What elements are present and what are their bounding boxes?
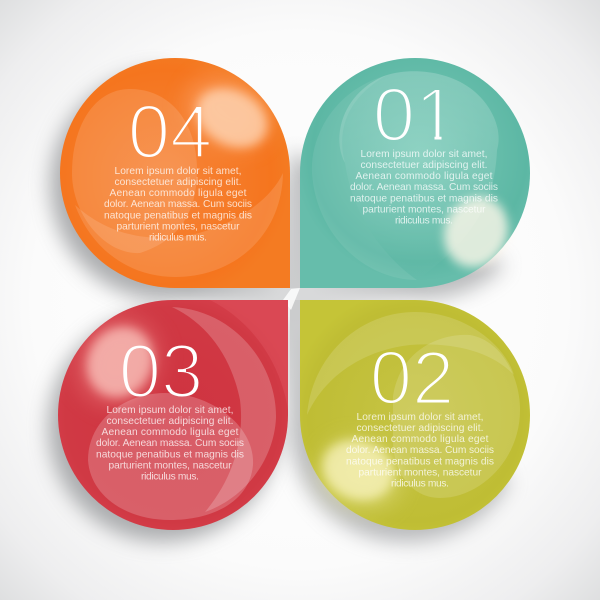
panel 01: teal drop [300,58,530,288]
glass halo [311,431,409,519]
glass lobe [339,71,499,280]
drop shape [300,58,530,288]
drop shape [300,300,530,530]
drop shape [58,300,288,530]
body text: dolor. Aenean massa. Cum sociis [346,445,494,456]
body text: natoque penatibus et magnis dis [350,193,498,204]
body text [346,412,494,490]
glass crescent [75,173,283,277]
glass highlight [433,186,519,278]
number: 03 [119,330,203,414]
body text [350,149,498,227]
drop shadows [48,70,510,542]
body text: parturient montes, nascetur [362,204,486,216]
body text: Lorem ipsum dolor sit amet, [106,405,234,416]
body text: natoque penatibus et magnis dis [96,449,244,460]
body text: parturient montes, nascetur [358,468,482,478]
body text: Aenean commodo ligula eget [352,434,489,445]
number: 01 [373,73,457,158]
body text: consectetuer adipiscing elit. [106,416,234,427]
body text: ridiculus mus. [391,479,449,490]
body text: Lorem ipsum dolor sit amet, [356,412,484,423]
body text: Lorem ipsum dolor sit amet, [114,166,242,177]
glass crescent [307,312,514,415]
body text: ridiculus mus. [395,216,453,227]
body text [104,166,252,244]
body text: Lorem ipsum dolor sit amet, [360,149,488,160]
body text: parturient montes, nascetur [108,460,232,472]
body text: natoque penatibus et magnis dis [346,456,494,467]
glass highlight [74,315,166,409]
glass highlight [187,77,277,159]
body text: consectetuer adipiscing elit. [360,160,488,171]
body text: Aenean commodo ligula eget [102,427,239,438]
body text: ridiculus mus. [149,233,207,244]
glass crescent [172,307,276,512]
panel 03: red drop [58,300,288,530]
body text: parturient montes, nascetur [116,222,240,232]
glass lobe [72,89,197,253]
body text: Aenean commodo ligula eget [356,171,493,182]
number: 04 [128,90,212,175]
glass halo [71,312,166,412]
body text: dolor. Aenean massa. Cum sociis [350,182,498,193]
body text [96,405,244,483]
body text: dolor. Aenean massa. Cum sociis [104,199,252,210]
glass crescent [312,75,417,280]
corner tint [210,300,288,410]
body text: natoque penatibus et magnis dis [104,210,252,221]
glass lobe [393,335,520,498]
body text: dolor. Aenean massa. Cum sociis [96,438,244,449]
body text: consectetuer adipiscing elit. [356,423,484,434]
body text: ridiculus mus. [141,472,199,483]
glass highlight [314,430,402,510]
body text: consectetuer adipiscing elit. [114,177,242,188]
body text: Aenean commodo ligula eget [110,188,247,199]
panel 02: green drop [300,300,530,530]
glass lobe [88,393,253,520]
panel 04: orange drop [60,58,290,288]
glass halo [179,68,278,156]
number: 02 [370,336,454,421]
drop shape [60,58,290,288]
